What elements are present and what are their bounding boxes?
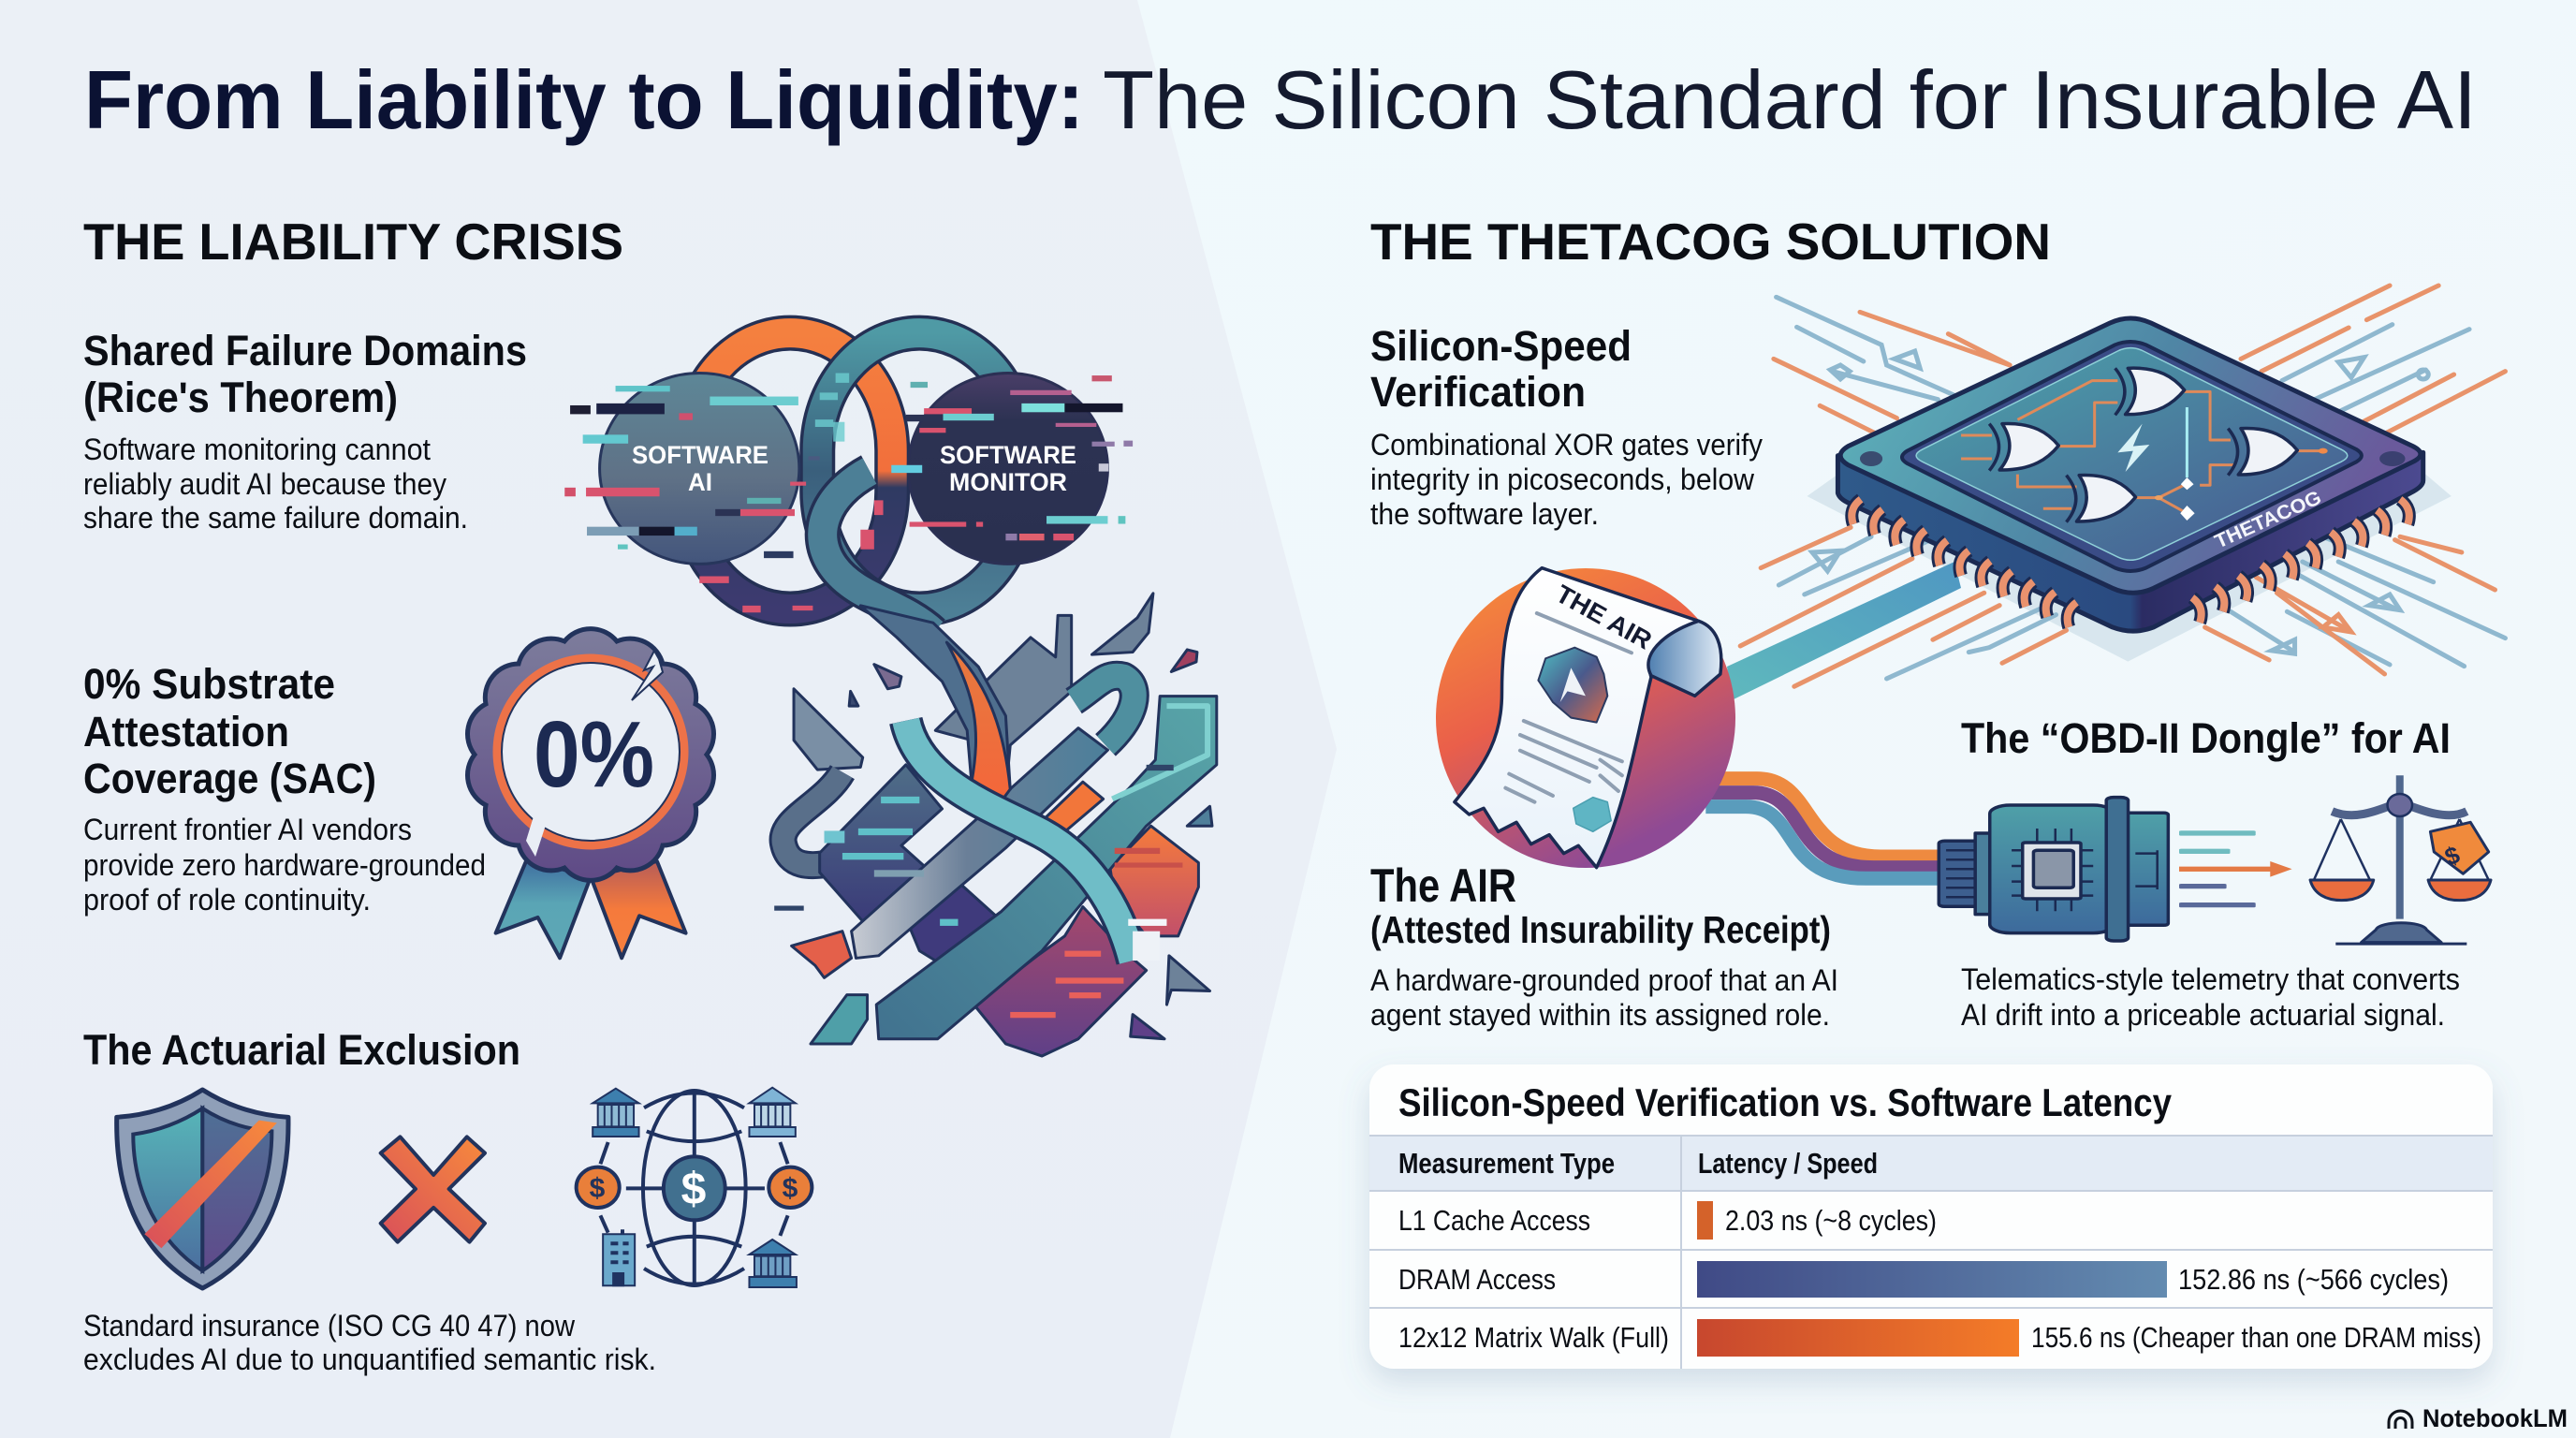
icon: left coin	[577, 1167, 620, 1208]
text block: substrate attestation coverage: proof of role continuity.	[83, 883, 371, 917]
text block: silicon-speed verification: the software layer.	[1370, 497, 1599, 531]
table card: silicon-speed verification vs software latency	[1369, 1064, 2493, 1369]
label: software AI: SOFTWARE	[632, 441, 768, 469]
row: L1 cache: L1 Cache Access	[1398, 1204, 1590, 1237]
icon: struck-through shield	[117, 1090, 288, 1288]
label: software AI	[632, 441, 768, 496]
label: software monitor: SOFTWARE	[940, 441, 1076, 469]
background: left panel wedge	[0, 0, 1337, 1438]
icon: bank bottom right	[749, 1240, 797, 1287]
row: DRAM: DRAM Access	[1398, 1263, 1556, 1296]
receipt text lines	[1505, 613, 1632, 802]
row: matrix walk	[1398, 1319, 2481, 1357]
table header: Measurement Type	[1398, 1147, 1615, 1180]
text block: shared failure domains	[83, 327, 527, 535]
text block: shared failure domains: share the same failure domain.	[83, 501, 468, 535]
text block: silicon-speed verification: Silicon-Speed	[1370, 322, 1632, 370]
text block: the AIR: A hardware-grounded proof that an AI	[1370, 963, 1838, 997]
heading: the liability crisis: THE LIABILITY CRISIS	[83, 213, 623, 271]
text block: the AIR: agent stayed within its assigned role.	[1370, 998, 1830, 1032]
text block: actuarial exclusion description: excludes AI due to unquantified semantic risk.	[83, 1343, 656, 1376]
text block: the AIR: The AIR	[1370, 859, 1516, 912]
title: From Liability to Liquidity:	[84, 53, 1084, 146]
icon: cracked 0% badge with ribbons: 0%	[534, 702, 654, 807]
text block: OBD-II dongle description: AI drift into a priceable actuarial signal.	[1961, 998, 2445, 1032]
text block: shared failure domains: (Rice's Theorem)	[83, 374, 398, 421]
text block: actuarial exclusion description: Standard insurance (ISO CG 40 47) now	[83, 1309, 576, 1343]
text block: shared failure domains: reliably audit AI because they	[83, 467, 446, 501]
text block: silicon-speed verification	[1370, 322, 1763, 531]
XOR gates	[1989, 368, 2297, 522]
labels: dollar signs on coins	[590, 1165, 798, 1214]
row: L1 cache: 2.03 ns (~8 cycles)	[1725, 1204, 1937, 1237]
icon: central dollar coin	[664, 1156, 725, 1220]
label: software AI: AI	[688, 468, 712, 496]
icon: AIR receipt on gradient circle	[1436, 568, 1735, 868]
panel: the thetacog solution	[1369, 213, 2505, 1369]
circle: software AI	[600, 373, 799, 564]
icon: balance scale with price tag	[2310, 775, 2491, 946]
icon: red X	[381, 1137, 485, 1242]
labels: dollar signs on coins: $	[783, 1173, 798, 1204]
text block: shared failure domains: Software monitoring cannot	[83, 433, 431, 466]
text block: substrate attestation coverage: 0% Substrate	[83, 660, 335, 708]
pins	[1852, 499, 2409, 627]
icon: right coin	[768, 1167, 812, 1208]
text block: OBD-II dongle description	[1961, 962, 2460, 1032]
text block: the AIR: (Attested Insurability Receipt)	[1370, 908, 1831, 951]
text block: OBD-II dongle description: Telematics-style telemetry that converts	[1961, 962, 2460, 996]
circle: software monitor	[908, 373, 1107, 564]
heading: the thetacog solution: THE THETACOG SOLUTION	[1370, 213, 2051, 271]
icon: cracked 0% badge with ribbons	[467, 629, 714, 958]
receipt seal	[1538, 648, 1607, 723]
row: matrix walk: 155.6 ns (Cheaper than one DRAM miss)	[2031, 1321, 2481, 1354]
table header	[1398, 1147, 1878, 1180]
icon: balance scale with price tag: $	[2441, 840, 2464, 872]
text block: actuarial exclusion description	[83, 1309, 656, 1376]
icon: bank top left	[593, 1089, 639, 1137]
text block: substrate attestation coverage: Coverage (SAC)	[83, 755, 376, 802]
heading: OBD-II dongle: The “OBD-II Dongle” for AI	[1961, 714, 2451, 762]
row: matrix walk: 12x12 Matrix Walk (Full)	[1398, 1321, 1669, 1354]
text block: actuarial exclusion heading: The Actuarial Exclusion	[83, 1026, 520, 1074]
row: L1 cache	[1398, 1201, 1937, 1240]
footer logo: NotebookLM: NotebookLM	[2422, 1404, 2568, 1432]
cable: receipt to dongle	[1705, 779, 1946, 878]
icon: office tower	[603, 1229, 635, 1285]
text block: substrate attestation coverage	[83, 660, 486, 917]
text block: silicon-speed verification: Combinational XOR gates verify	[1370, 428, 1763, 462]
receipt paper	[1455, 568, 1699, 868]
text block: the AIR	[1370, 859, 1838, 1032]
table header: Latency / Speed	[1698, 1147, 1878, 1180]
text block: substrate attestation coverage: provide zero hardware-grounded	[83, 848, 486, 882]
illustration: interlocked rings, software AI and software monitor	[564, 333, 1133, 633]
panel: the liability crisis	[83, 213, 1217, 1376]
title: The Silicon Standard for Insurable AI	[1103, 53, 2477, 146]
receipt curl	[1648, 621, 1721, 696]
title	[84, 53, 2477, 146]
table title: Silicon-Speed Verification vs. Software Latency	[1398, 1080, 2173, 1124]
text block: substrate attestation coverage: Attestation	[83, 708, 289, 756]
text block: silicon-speed verification: Verification	[1370, 368, 1586, 416]
label: software monitor	[940, 441, 1076, 496]
row: DRAM	[1398, 1261, 2449, 1298]
icon: bank top right	[749, 1088, 796, 1137]
label: software monitor: MONITOR	[949, 468, 1067, 496]
connector beam: receipt to chip	[1727, 562, 1961, 700]
icon: OBD-II dongle	[1939, 798, 2292, 941]
text block: substrate attestation coverage: Current frontier AI vendors	[83, 813, 412, 846]
label: THETACOG on chip: THETACOG	[2212, 487, 2324, 553]
illustration: circuit traces behind chip	[1740, 286, 2505, 686]
labels: dollar signs on coins: $	[590, 1173, 606, 1204]
text block: silicon-speed verification: integrity in picoseconds, below	[1370, 462, 1755, 496]
labels: dollar signs on coins: $	[681, 1165, 707, 1214]
text block: shared failure domains: Shared Failure Domains	[83, 327, 527, 374]
row: DRAM: 152.86 ns (~566 cycles)	[2178, 1263, 2449, 1296]
circuit wiring on chip	[1961, 381, 2323, 513]
icon: global finance network	[577, 1088, 812, 1287]
icon: AIR receipt on gradient circle: THE AIR	[1551, 580, 1657, 655]
illustration: shattered tangle of bars and ribbons	[774, 594, 1217, 1056]
illustration: Thetacog chip with XOR gates	[1837, 318, 2423, 631]
